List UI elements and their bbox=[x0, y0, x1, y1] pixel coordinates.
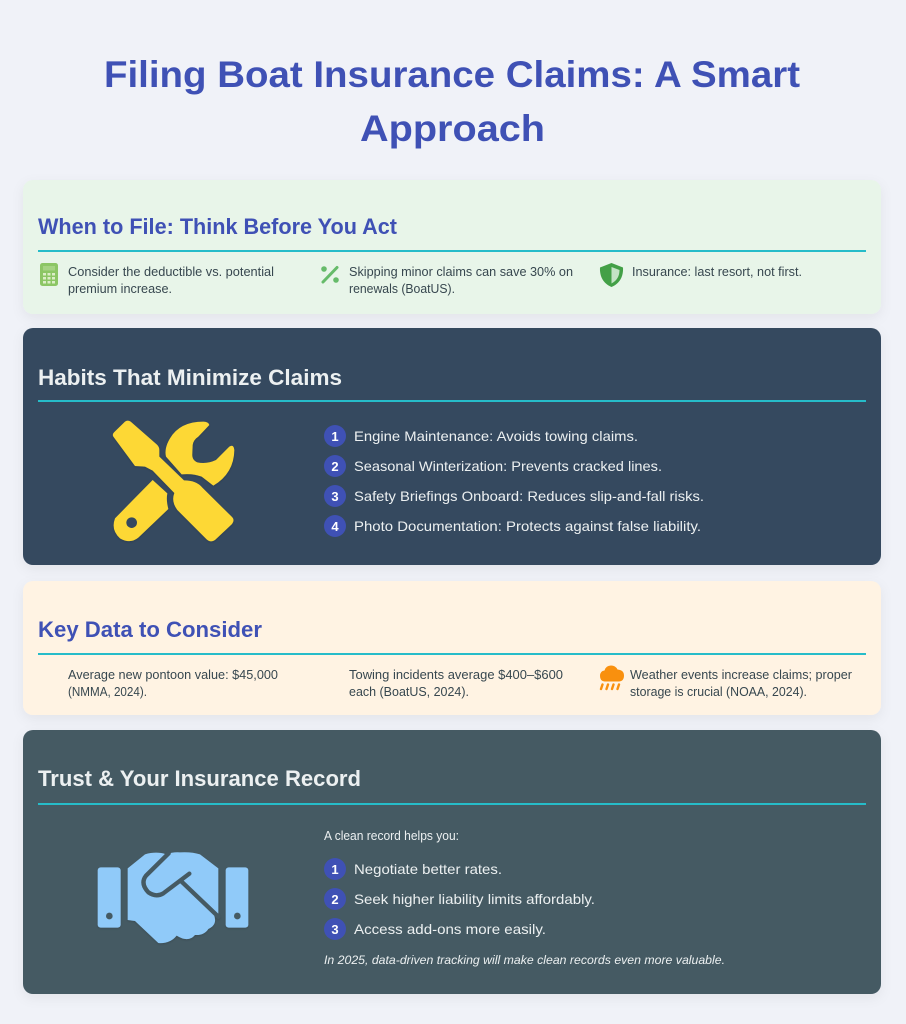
numbered list: benefits: 1 bbox=[331, 862, 339, 877]
numbered list: habits bbox=[324, 425, 704, 537]
icon: percent bbox=[321, 266, 339, 283]
title bbox=[104, 54, 800, 149]
icon: tools bbox=[113, 421, 234, 541]
icon: handshake bbox=[98, 852, 248, 943]
numbered list: benefits: 2 bbox=[331, 892, 339, 907]
panel: when to file bbox=[23, 180, 881, 314]
icon: calculator bbox=[40, 263, 58, 286]
panel: habits bbox=[23, 328, 881, 565]
numbered list: benefits: Negotiate better rates. bbox=[354, 861, 502, 877]
numbered list: habits: Safety Briefings Onboard: Reduces slip-and-fall risks. bbox=[354, 488, 704, 504]
numbered list: benefits bbox=[324, 858, 595, 940]
numbered list: habits: Photo Documentation: Protects against false liability. bbox=[354, 518, 701, 534]
text: towing incidents bbox=[349, 668, 563, 699]
numbered list: habits: 2 bbox=[331, 459, 339, 474]
text: deductible: premium increase. bbox=[68, 282, 172, 296]
numbered list: habits: 1 bbox=[331, 429, 339, 444]
panel: trust bbox=[23, 730, 881, 994]
heading: trust: Trust & Your Insurance Record bbox=[38, 766, 361, 791]
text: pontoon value: Average new pontoon value: $45,000 bbox=[68, 668, 278, 682]
text: weather events: storage is crucial (NOAA, 2024). bbox=[630, 685, 807, 699]
text: 2025 note: In 2025, data-driven tracking will make clean records even more valuable. bbox=[324, 953, 725, 967]
icon: shield bbox=[600, 263, 623, 287]
heading: key data: Key Data to Consider bbox=[38, 617, 262, 642]
numbered list: habits: Engine Maintenance: Avoids towing claims. bbox=[354, 428, 638, 444]
text: pontoon value bbox=[68, 668, 278, 699]
panel: key data bbox=[23, 581, 881, 715]
text: skipping minor claims: renewals (BoatUS). bbox=[349, 282, 455, 296]
title: Approach bbox=[360, 108, 545, 149]
numbered list: habits: 4 bbox=[331, 519, 339, 534]
text: towing incidents: Towing incidents average $400–$600 bbox=[349, 668, 563, 682]
text: weather events: Weather events increase claims; proper bbox=[630, 668, 852, 682]
text: pontoon value: (NMMA, 2024). bbox=[68, 685, 147, 699]
text: skipping minor claims: Skipping minor claims can save 30% on bbox=[349, 265, 573, 279]
title: Filing Boat Insurance Claims: A Smart bbox=[104, 54, 800, 95]
numbered list: benefits: Seek higher liability limits affordably. bbox=[354, 891, 595, 907]
text: last resort: Insurance: last resort, not first. bbox=[632, 265, 802, 279]
text: deductible bbox=[68, 265, 274, 296]
text: deductible: Consider the deductible vs. potential bbox=[68, 265, 274, 279]
text: weather events bbox=[630, 668, 852, 699]
text: skipping minor claims bbox=[349, 265, 573, 296]
icon: rain cloud bbox=[600, 666, 624, 689]
text: towing incidents: each (BoatUS, 2024). bbox=[349, 685, 469, 699]
numbered list: habits: 3 bbox=[331, 489, 339, 504]
numbered list: benefits: 3 bbox=[331, 922, 339, 937]
numbered list: habits: Seasonal Winterization: Prevents cracked lines. bbox=[354, 458, 662, 474]
text: clean record intro: A clean record helps you: bbox=[324, 829, 459, 843]
heading: habits: Habits That Minimize Claims bbox=[38, 365, 342, 390]
heading: when to file: When to File: Think Before You Act bbox=[38, 214, 398, 239]
numbered list: benefits: Access add-ons more easily. bbox=[354, 921, 546, 937]
